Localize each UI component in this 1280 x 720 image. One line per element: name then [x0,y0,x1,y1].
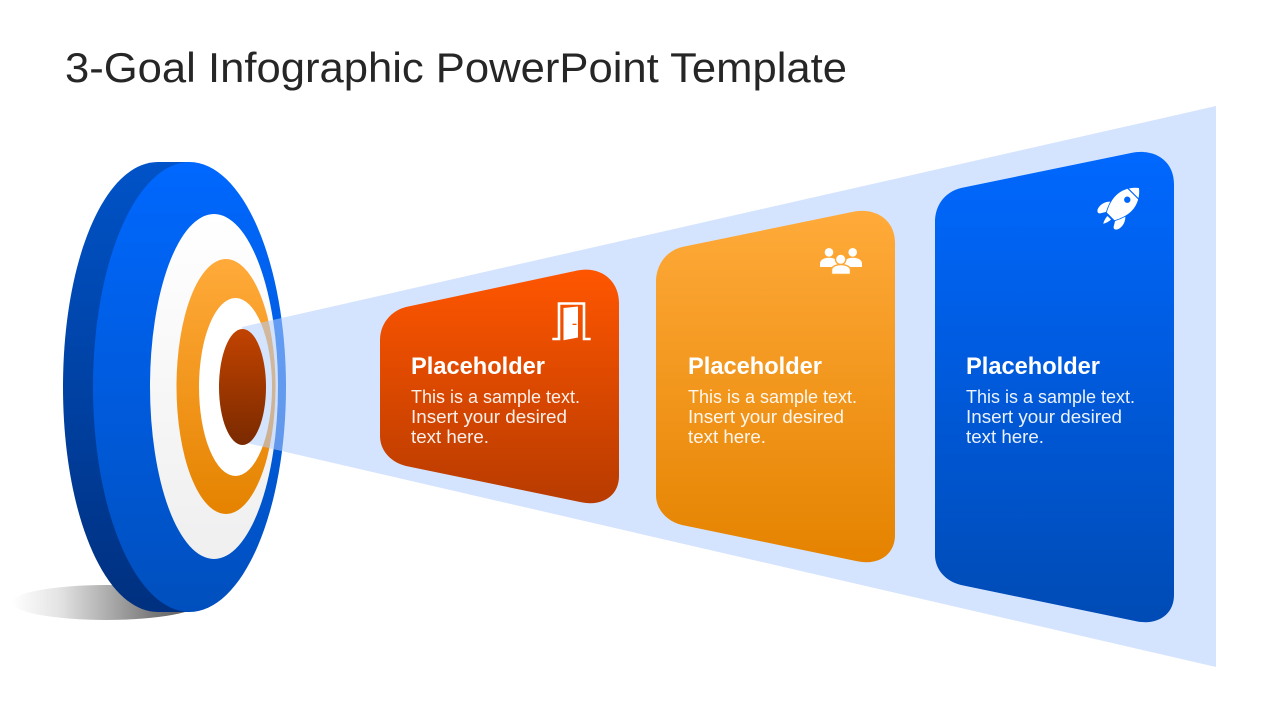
bullseye [219,329,266,445]
icon: people [820,248,862,274]
card 1 body text [411,387,580,447]
card 2 body text: This is a sample text. [688,387,857,407]
card 3 body text [966,387,1135,447]
icon: rocket [1093,177,1150,234]
card 3 heading: Placeholder [966,353,1100,380]
card 1 body text: This is a sample text. [411,387,580,407]
target graphic [63,162,286,612]
target side wall [63,162,190,612]
inner white ring [199,298,272,476]
panel: goal 1 card [380,270,619,503]
card 2 heading: Placeholder [688,353,822,380]
panel: goal 2 card [656,211,895,562]
light blue beam [242,106,1216,667]
card 3 body text: This is a sample text. [966,387,1135,407]
orange ring [176,259,276,514]
white ring [150,214,278,559]
target shadow [12,585,200,620]
card 2 background [656,211,895,562]
icon: door [552,304,591,340]
card 1 body text: text here. [411,427,489,447]
card 1 heading: Placeholder [411,353,545,380]
card 2 body text [688,387,857,447]
title: 3-Goal Infographic PowerPoint Template [65,44,847,91]
card 3 body text: Insert your desired [966,407,1122,427]
outer blue ring [93,162,286,612]
card 1 body text: Insert your desired [411,407,567,427]
card 2 body text: text here. [688,427,766,447]
panel: goal 3 card [935,152,1174,622]
card 1 background [380,270,619,503]
card 3 body text: text here. [966,427,1044,447]
card 3 background [935,152,1174,622]
card 2 body text: Insert your desired [688,407,844,427]
